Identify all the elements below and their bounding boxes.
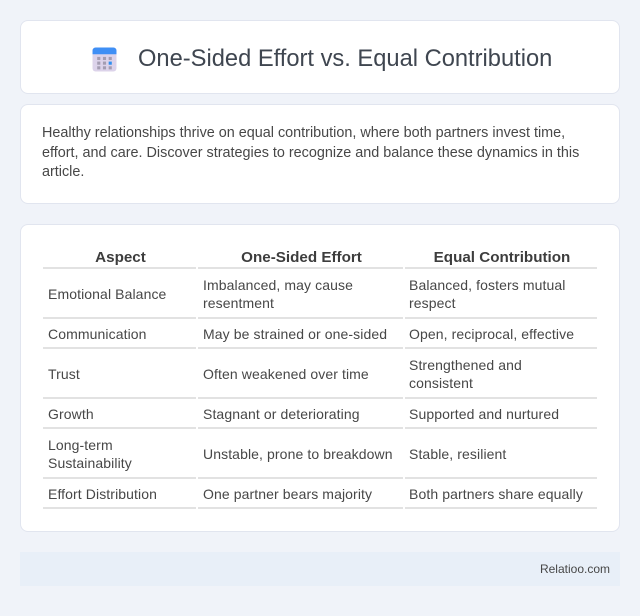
row: Growth [48, 406, 559, 422]
row: Emotional Balance: resentment [203, 295, 274, 311]
table header: One-Sided Effort [241, 249, 362, 266]
header panel [20, 20, 620, 94]
row: Trust: Trust [48, 366, 80, 382]
intro text: effort, and care. Discover strategies to recognize and balance these dynamics in this [42, 145, 579, 161]
row: Emotional Balance: Imbalanced, may cause [203, 277, 353, 293]
row: Effort Distribution: Both partners share equally [409, 486, 583, 502]
row: Emotional Balance: Balanced, fosters mutual [409, 277, 565, 293]
row: Emotional Balance: Emotional Balance [48, 286, 166, 302]
intro panel [20, 104, 620, 204]
row: Communication: Communication [48, 326, 147, 342]
row: Communication: May be strained or one-sided [203, 326, 387, 342]
table header [95, 249, 570, 266]
icon: calendar [92, 48, 116, 72]
panel: comparison table [20, 224, 620, 532]
row: Long-term Sustainability [48, 437, 506, 471]
row: Long-term Sustainability: Sustainability [48, 455, 132, 471]
row: Growth: Supported and nurtured [409, 406, 559, 422]
intro text: Healthy relationships thrive on equal contribution, where both partners invest time, [42, 125, 565, 141]
row: Trust: consistent [409, 375, 473, 391]
footer bar [20, 552, 620, 586]
intro text: article. [42, 164, 84, 180]
table header: Aspect [95, 249, 146, 266]
row: Emotional Balance: respect [409, 295, 456, 311]
title: One-Sided Effort vs. Equal Contribution [138, 46, 552, 72]
row: Communication: Open, reciprocal, effective [409, 326, 574, 342]
row: Trust: Strengthened and [409, 357, 522, 373]
row: Growth: Stagnant or deteriorating [203, 406, 360, 422]
footer text: Relatioo.com [540, 562, 610, 576]
row: Effort Distribution [48, 486, 583, 502]
row: Long-term Sustainability: Unstable, prone to breakdown [203, 446, 393, 462]
row: Communication [48, 326, 574, 342]
row: Long-term Sustainability: Long-term [48, 437, 113, 453]
row: Effort Distribution: One partner bears majority [203, 486, 372, 502]
row: Effort Distribution: Effort Distribution [48, 486, 157, 502]
table header: Equal Contribution [434, 249, 570, 266]
intro text [42, 125, 579, 180]
row: Trust: Often weakened over time [203, 366, 369, 382]
row: Emotional Balance [48, 277, 565, 311]
row: Trust [48, 357, 522, 391]
row: Growth: Growth [48, 406, 94, 422]
row: Long-term Sustainability: Stable, resilient [409, 446, 506, 462]
